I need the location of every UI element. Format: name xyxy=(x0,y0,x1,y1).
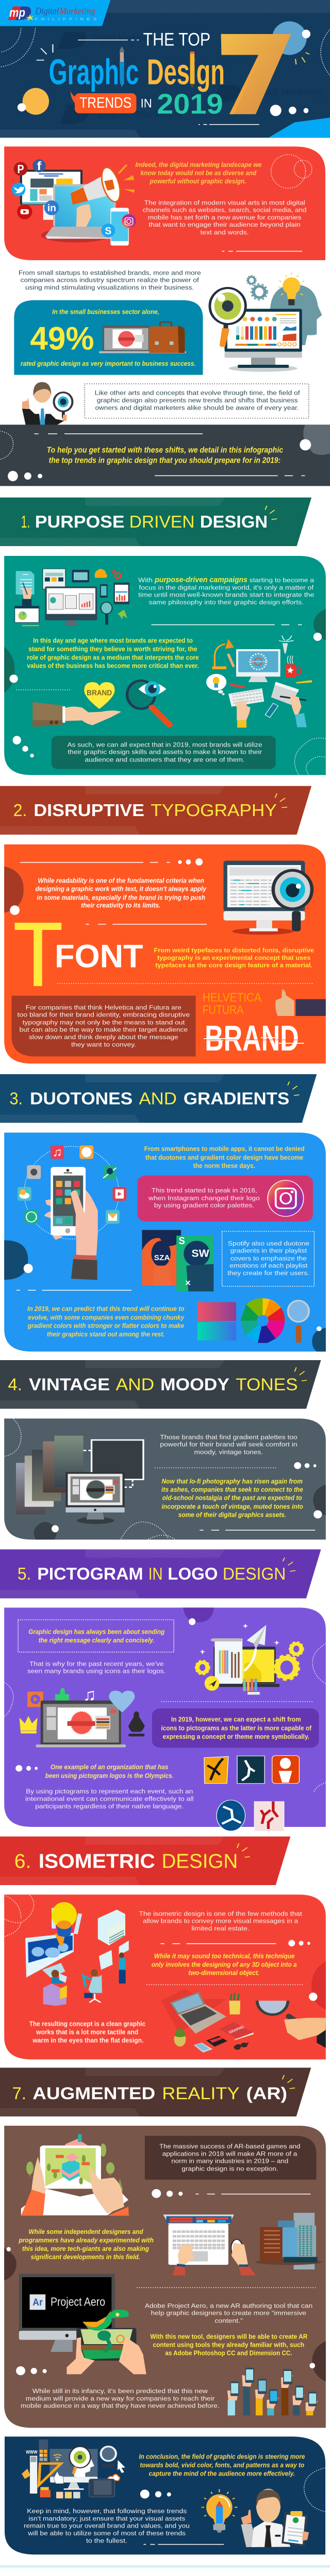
illustration: monitor and magnifier xyxy=(223,861,312,935)
text: keep in mind: to the fullest. xyxy=(86,2537,127,2544)
watermark logos: Digital Marketing xyxy=(98,108,183,120)
callout: like other arts xyxy=(85,384,309,418)
text: purpose-driven campaigns: purpose-driven campaigns xyxy=(154,575,248,584)
banner: section 4 heading: VINTAGE xyxy=(29,1375,110,1394)
typeface samples: FUTURA xyxy=(203,1003,243,1016)
text: in this day and age: In this day and age where most brands are expected to xyxy=(33,637,193,645)
illustration: magnifier with eye xyxy=(127,681,170,725)
numeral 7 xyxy=(221,21,310,114)
illustration: muted palette cards and monitor xyxy=(16,1436,143,1524)
title: the top: THE TOP xyxy=(143,30,210,49)
illustration: desk bottom xyxy=(206,674,312,727)
banner: section 3 heading: GRADIENTS xyxy=(184,1089,289,1108)
illustration: paper plane laptop and gears xyxy=(196,1624,303,1694)
text: while readability: in some materials, especially if the brand is trying to push xyxy=(37,894,205,902)
illustration: man with magnifier xyxy=(22,382,72,425)
callout: for companies: For companies that think Helvetica and Futura are xyxy=(26,1004,182,1011)
panel: section 3 xyxy=(4,1132,326,1351)
banner: section 4 heading xyxy=(0,1360,321,1409)
panel: 49% statistic xyxy=(14,300,203,375)
text: that is why: seen many brands using icons as their logos. xyxy=(27,1668,166,1674)
banner: section 1 heading: DRIVEN xyxy=(129,512,195,531)
banner: section 6 heading xyxy=(0,1837,290,1885)
text: resulting concept xyxy=(29,2021,145,2044)
illustration: spotify playlist covers: SZA xyxy=(154,1253,170,1262)
banner: section 3 heading: AND xyxy=(139,1089,177,1108)
text: olympics example xyxy=(45,1764,174,1780)
watermark logos: Digital Marketing xyxy=(92,32,152,43)
text: isometric design xyxy=(139,1910,302,1932)
title: trends in 2019 xyxy=(71,88,223,120)
watermark logos xyxy=(57,32,324,124)
illustration: spotify playlist covers: S xyxy=(179,1235,185,1246)
callout: for companies: they want to convey. xyxy=(71,1041,136,1048)
panel: section 7 xyxy=(4,2126,326,2428)
text: while readability: designing a graphic work with text, it doesn't always apply xyxy=(36,886,207,893)
banner: section 2 heading xyxy=(0,786,311,835)
illustration: project aero monitor and dinosaur xyxy=(19,2274,146,2374)
illustration: laptop hands and skyline continued xyxy=(169,2224,322,2276)
illustration: monitor, laptop and megaphone xyxy=(20,165,135,246)
text: keep in mind xyxy=(24,2507,190,2544)
text: independent designers: While some independent designers and xyxy=(29,2228,143,2236)
callout: AR success: norm in many industries in 2019 – and xyxy=(171,2158,288,2164)
text: adobe project aero: help graphic designers to create more “immersive xyxy=(151,2310,306,2316)
banner: section 3 heading: 3. xyxy=(9,1089,23,1108)
icon: laptop and briefcase xyxy=(99,322,186,353)
illustration: laptop, hands and city xyxy=(163,2213,315,2269)
callout: instagram xyxy=(138,1176,313,1222)
text: from weird typefaces: typography is an experimental concept that uses xyxy=(157,954,310,961)
title: trends in 2019: 2019 xyxy=(157,88,223,120)
title: trends in 2019: IN xyxy=(141,96,152,110)
callout: as such xyxy=(52,736,276,769)
illustration: brand heart and hand: BRAND xyxy=(87,689,112,697)
text: olympics example: One example of an organization that has xyxy=(51,1764,169,1771)
banner: section 6 heading: DESIGN xyxy=(161,1850,238,1873)
text: technical xyxy=(152,1953,297,1977)
illustration: design tools xyxy=(22,2439,125,2498)
logo xyxy=(0,0,110,26)
icon: lightbulb with pencil xyxy=(202,2489,237,2533)
callout: sending the right message: Graphic design has always been about sending xyxy=(28,1629,164,1636)
callout: for companies: but can also be the way to make their target audience xyxy=(20,1026,188,1033)
text: purpose-driven campaigns: same philosophy into their graphic design efforts. xyxy=(149,599,304,606)
banner: section 2 heading: 2. xyxy=(13,801,27,820)
text: intro lead xyxy=(135,161,261,185)
text: intro body: text and words. xyxy=(201,229,249,236)
callout: spotify: covers to emphasize the xyxy=(230,1255,307,1262)
text: from weird typefaces: typefaces as the core design feature of a material. xyxy=(155,962,312,969)
text: intro body: channels such as websites, search, social media, and xyxy=(143,207,306,213)
text: those brands: Those brands that find gradient palettes too xyxy=(160,1434,298,1440)
illustration: project aero monitor and dinosaur: Ar xyxy=(32,2296,43,2308)
text: those brands: moody, vintage tones. xyxy=(194,1449,263,1455)
illustration: laptop with icons: ♫ xyxy=(82,1685,96,1705)
text: in 2019 prediction: their graphics stand out among the rest. xyxy=(47,1331,165,1338)
banner: section 5 heading: IN xyxy=(148,1564,163,1583)
text: those brands xyxy=(160,1434,298,1455)
banner: section 4 heading: TONES xyxy=(236,1375,298,1394)
illustration: laptop with icons xyxy=(20,1685,145,1748)
callout: spotify: emotions of each playlist xyxy=(229,1262,308,1269)
banner: section 4 heading: 4. xyxy=(8,1375,22,1394)
logo: PHILIPPINES xyxy=(35,17,97,21)
illustration: man with clipboard xyxy=(241,2489,309,2547)
typeface samples: HELVETICA xyxy=(203,991,261,1004)
text: startups paragraph: using mind stimulating visualizations in their business. xyxy=(25,284,194,291)
title: trends in 2019: TRENDS xyxy=(79,94,131,111)
banner: section 2 heading: DISRUPTIVE xyxy=(34,801,144,820)
logo: mp xyxy=(9,6,25,20)
callout: spotify xyxy=(222,1231,314,1286)
text: purpose-driven campaigns: With xyxy=(138,577,153,584)
text: isometric design: allow brands to convey more visual messages in a xyxy=(143,1918,299,1924)
callout: AR success xyxy=(145,2136,316,2180)
banner: section 4 heading: AND xyxy=(116,1375,154,1394)
callout: as such: As such, we can all expect that in 2019, most brands will utilize xyxy=(68,741,262,748)
icons: olympic pictograms xyxy=(204,1756,299,1831)
text: resulting concept: The resulting concept is a clean graphic xyxy=(29,2021,145,2028)
banner: section 2 heading: TYPOGRAPHY xyxy=(151,801,277,820)
illustration: smartphone with app icons: ♫ xyxy=(52,1145,62,1159)
callout: instagram: when Instagram changed their logo xyxy=(148,1195,260,1201)
text: purpose-driven campaigns xyxy=(138,575,315,606)
banner: section 7 heading: REALITY xyxy=(162,2083,240,2103)
callout: instagram: by using gradient color palettes. xyxy=(154,1202,254,1209)
text: startups paragraph: From small startups to established brands, more and more xyxy=(19,269,201,276)
illustration: project aero monitor and dinosaur: Project Aero xyxy=(51,2295,105,2309)
text: lo-fi photography: some of their digital graphics assets. xyxy=(178,1512,286,1519)
panel: 49% statistic: rated graphic design as very important to business success. xyxy=(21,360,196,368)
text: isometric design: limited real estate. xyxy=(191,1925,250,1932)
panel: section 2 xyxy=(4,844,326,1063)
icons: social media: f xyxy=(37,159,42,173)
text: those brands: powerful for their brand will seek comfort in xyxy=(160,1441,298,1448)
banner: section 3 heading: DUOTONES xyxy=(30,1089,133,1108)
banner: section 6 heading: 6. xyxy=(14,1850,31,1873)
text: keep in mind: will be able to utilize some of most of these trends xyxy=(27,2530,186,2537)
text: while readability: their creativity to its limits. xyxy=(81,902,160,909)
illustration: hands holding phones xyxy=(227,2368,318,2415)
banner: section 5 heading: PICTOGRAM xyxy=(37,1564,143,1583)
text: in this day and age: role of graphic design as a medium that interprets the core xyxy=(27,654,199,662)
text: in 2019 prediction: evolve, with some companies even combining chunky xyxy=(28,1314,185,1321)
panel: conclusion xyxy=(5,2436,325,2554)
text: in 2019 prediction: gradient colors with stronger or flatter colors to make xyxy=(27,1323,184,1330)
text: new tool xyxy=(150,2333,308,2357)
callout: for companies: typography may not only be the means to stand out xyxy=(23,1019,185,1026)
callout: spotify: gradients in their playlist xyxy=(230,1247,307,1254)
banner: section 5 heading: 5. xyxy=(18,1564,31,1583)
illustration: isometric rocket, screen and team xyxy=(25,1902,129,2006)
callout: sending the right message: the right message clearly and concisely. xyxy=(39,1637,155,1645)
text: by using pictograms: By using pictograms to represent each event, such an xyxy=(26,1788,193,1795)
statistic: 49%: 49% xyxy=(30,320,94,357)
icons: social media: S xyxy=(105,225,111,236)
text: adobe project aero: content.” xyxy=(214,2317,243,2324)
banner: section 7 heading xyxy=(0,2067,311,2116)
callout: instagram: This trend started to peak in 2016, xyxy=(152,1187,257,1194)
text: keep in mind: isn't mandatory; just ensure that your visual assets xyxy=(29,2515,185,2522)
text: that is why xyxy=(27,1660,166,1674)
illustration: gradients and colour wheel xyxy=(197,1298,309,1343)
illustration: spotify playlist covers: x xyxy=(185,1278,191,1287)
decorative letter T xyxy=(15,923,61,986)
text: conclusion xyxy=(139,2453,305,2478)
banner: section 1 heading: 1. xyxy=(21,512,30,531)
text: intro lead: Indeed, the digital marketing landscape we xyxy=(135,161,261,169)
text: resulting concept: warm in the eyes than the flat design. xyxy=(32,2037,143,2044)
text: in 2019 prediction: In 2019, we can predict that this trend will continue to xyxy=(27,1306,185,1313)
callout: shift to pictograms xyxy=(152,1708,319,1748)
banner: section 7 heading: 7. xyxy=(12,2083,26,2103)
icons: social media: P xyxy=(17,162,24,176)
panel: section 6 xyxy=(4,1894,326,2059)
text: in this day and age: stand for something they believe is worth striving for, the xyxy=(28,646,197,653)
text: in 2019 prediction xyxy=(27,1306,185,1338)
callout: spotify: they create for their users. xyxy=(227,1269,309,1277)
text: olympics example: been using pictogram logos is the Olympics. xyxy=(45,1772,174,1780)
text: isometric design: The isometric design is one of the few methods that xyxy=(139,1910,302,1917)
text: resulting concept: works that is a lot more tactile and xyxy=(36,2029,138,2036)
callout: for companies xyxy=(11,996,196,1057)
text: adobe project aero xyxy=(145,2302,312,2324)
text: adobe project aero: Adobe Project Aero, a new AR authoring tool that can xyxy=(145,2302,312,2309)
banner: section 7 heading: AUGMENTED xyxy=(32,2083,155,2103)
callout: as such: their graphic design skills and assets to make it known to their xyxy=(68,749,262,755)
text: transition xyxy=(47,445,283,465)
text: that is why: That is why for the past recent years, we've xyxy=(29,1660,164,1667)
text: still in its infancy: While still in its infancy, it's been predicted that this new xyxy=(32,2387,208,2395)
text: independent designers: this idea, more tech-giants are also making xyxy=(22,2245,149,2253)
text: by using pictograms: participants regardless of their native language. xyxy=(35,1803,184,1810)
text: independent designers xyxy=(19,2228,154,2261)
banner: section 5 heading xyxy=(0,1549,321,1598)
text: by using pictograms: international event can communicate effectively to all xyxy=(25,1795,194,1802)
callout: spotify: Spotify also used duotone xyxy=(228,1240,309,1247)
text: intro lead: know today would not be as diverse and xyxy=(141,170,257,177)
callout: AR success: The massive success of AR-based games and xyxy=(159,2143,300,2150)
banner: section 6 heading: ISOMETRIC xyxy=(39,1850,155,1873)
text: still in its infancy xyxy=(21,2387,220,2409)
text: purpose-driven campaigns: focus in the digital marketing world, it's only a matter of xyxy=(139,584,314,591)
callout: AR success: graphic design is no exception. xyxy=(182,2165,278,2172)
text: purpose-driven campaigns: time until most well-known brands start to integrate the xyxy=(138,591,314,598)
text: intro body: The integration of modern visual arts in most digital xyxy=(144,199,305,206)
panel: section 4 xyxy=(4,1418,326,1539)
panel: 49% statistic: In the small businesses sector alone, xyxy=(52,309,159,316)
text: from smartphones: the norm these days. xyxy=(193,1162,255,1170)
illustration: dashboards and devices xyxy=(15,569,129,626)
text: while readability: While readability is one of the fundamental criteria when xyxy=(38,877,204,885)
text: startups paragraph: companies across industry spectrum realize the power of xyxy=(21,277,199,283)
banner: section 7 heading: (AR) xyxy=(246,2083,287,2103)
callout: for companies: too bland for their brand identity, embracing disruptive xyxy=(17,1011,190,1018)
callout: like other arts: owners and digital marketers alike should be aware of every year. xyxy=(95,404,299,411)
callout: for companies: slow down and think deeply about the message xyxy=(29,1033,178,1041)
logo: Digital xyxy=(35,5,59,16)
title: graphic design: Graphic xyxy=(49,53,139,92)
text: intro lead: powerful without graphic design. xyxy=(150,178,246,185)
text: while readability xyxy=(36,877,207,909)
illustration: head, monitor, magnifier xyxy=(210,273,322,372)
text: independent designers: programmers have already experimented with xyxy=(19,2237,154,2244)
header banner xyxy=(0,0,330,138)
illustration: spotify playlist covers xyxy=(142,1230,213,1292)
typeface samples xyxy=(203,991,261,1016)
text: by using pictograms xyxy=(25,1788,194,1810)
illustration: spotify playlist covers: SW xyxy=(191,1247,210,1259)
text: font lettering: FONT xyxy=(55,938,143,975)
banner: section 1 heading: DESIGN xyxy=(200,512,268,531)
banner: section 5 heading: LOGO xyxy=(168,1564,218,1583)
text: lo-fi photography xyxy=(161,1478,303,1519)
illustration: design tools: WWW xyxy=(26,2450,38,2455)
text: startups paragraph xyxy=(19,269,201,291)
banner: section 3 heading xyxy=(0,1074,317,1123)
illustration: isometric desk continued xyxy=(174,2018,326,2053)
illustration: designer desk xyxy=(212,635,301,675)
icon: thumbs up xyxy=(275,989,326,1016)
callout: AR success: applications in 2018 will make AR more of a xyxy=(162,2150,298,2157)
illustration: tablet AR city xyxy=(21,2134,129,2216)
banner: section 1 heading xyxy=(0,498,311,546)
callout: like other arts: Like other arts and concepts that evolve through time, the field of xyxy=(95,389,300,396)
logo: Marketing xyxy=(59,5,95,16)
callout: sending the right message xyxy=(18,1620,174,1652)
text: intro body xyxy=(143,199,306,236)
illustration: isometric desk xyxy=(161,1989,305,2033)
title: graphic design: Design xyxy=(147,53,225,92)
text: intro body: that want to engage their audience beyond plain xyxy=(149,221,301,228)
illustration: smartphone with app icons xyxy=(18,1145,126,1280)
banner: section 5 heading: DESIGN xyxy=(223,1564,286,1583)
text: from smartphones xyxy=(144,1145,305,1170)
panel: transition band xyxy=(0,425,330,486)
text: still in its infancy: medium will provide a new way for companies to reach their xyxy=(26,2395,215,2402)
text: in this day and age: values of the business has become more critical than ever. xyxy=(27,663,199,670)
text: purpose-driven campaigns: starting to become a xyxy=(250,577,315,584)
text: keep in mind: Keep in mind, however, that following these trends xyxy=(27,2507,187,2515)
illustration: brand heart and hand xyxy=(16,682,121,727)
text: independent designers: significant developments in this field. xyxy=(31,2253,140,2261)
icon: instagram logo xyxy=(268,1180,304,1216)
text: keep in mind: remain true to your overall brand and values, and you xyxy=(24,2522,190,2529)
text: in this day and age xyxy=(27,637,199,670)
icons: social media xyxy=(11,159,136,238)
panel: section 5 xyxy=(4,1607,326,1831)
text: intro body: mobile has set forth a new avenue for companies xyxy=(148,214,302,221)
decorative circles xyxy=(18,88,308,125)
illustration: isometric desk continued: GRAPHIC xyxy=(228,2025,245,2035)
callout: as such: audience and customers that they are one of them. xyxy=(85,756,245,763)
callout: like other arts: graphic design also presents new trends and shifts that business xyxy=(97,397,298,404)
text: still in its infancy: mobile audience in a way that they have never achieved before. xyxy=(21,2402,220,2409)
panel: intro xyxy=(4,146,325,260)
banner: section 4 heading: MOODY xyxy=(160,1375,229,1394)
panel: section 1 xyxy=(4,556,326,775)
icons: social media: in xyxy=(47,202,56,213)
text: technical: two-dimensional object. xyxy=(188,1970,259,1977)
banner: section 1 heading: PURPOSE xyxy=(35,512,125,531)
text: from weird typefaces xyxy=(154,947,314,969)
